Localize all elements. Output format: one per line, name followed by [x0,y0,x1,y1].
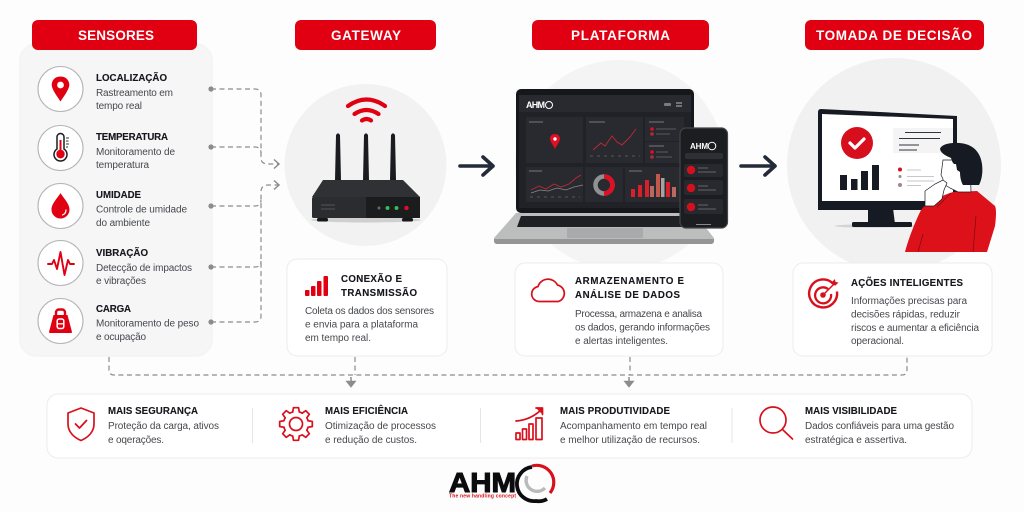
sensor: vibração: VIBRAÇÃO [96,248,148,259]
sensor: umidade: UMIDADE [96,190,142,201]
illustration: laptop dashboard: AHM [526,100,545,110]
benefit: mais produtividade [516,406,707,446]
benefit: mais visibilidade [760,406,954,446]
sensor: umidade [38,184,187,229]
card: conexão e transmissão: e envia para a plataforma [305,320,418,330]
heading: sensores [32,20,197,50]
card: armazenamento e análise: ARMAZENAMENTO E [575,276,685,287]
card: conexão e transmissão: Coleta os dados dos sensores [305,306,434,317]
card: ações inteligentes: riscos e aumentar a eficiência [851,323,979,334]
benefit: mais produtividade: MAIS PRODUTIVIDADE [560,406,671,417]
panel: gateway [284,20,447,356]
benefit: mais eficiência: MAIS EFICIÊNCIA [325,405,408,417]
panel: plataforma [494,20,728,356]
benefit: mais segurança: Proteção da carga, ativos [108,421,219,432]
sensor: localização: LOCALIZAÇÃO [96,73,167,84]
card: armazenamento e análise: os dados, gerando informações [575,322,710,334]
panel: benefits [47,394,972,458]
benefit: mais visibilidade: MAIS VISIBILIDADE [805,406,898,417]
illustration: phone: AHM [690,142,708,151]
sensor: carga [38,298,199,344]
sensor: carga: CARGA [96,304,131,315]
sensor: localização [38,66,173,112]
arrow: platform to decision [741,157,775,175]
benefit: mais visibilidade: Dados confiáveis para uma gestão [805,421,954,432]
heading: tomada de decisão: TOMADA DE DECISÃO [816,28,972,43]
card: armazenamento e análise: e alertas inteligentes. [575,336,668,347]
heading: plataforma [532,20,709,50]
icon: gear [280,408,312,440]
benefit: mais eficiência: Otimização de processos [325,421,436,432]
card: ações inteligentes [793,263,992,356]
sensor: temperatura: temperatura [96,160,149,171]
card: ações inteligentes: Informações precisas para [851,296,967,307]
sensor: umidade: do ambiente [96,218,150,229]
logo: AHM [449,465,554,501]
card: ações inteligentes: operacional. [851,336,904,347]
connector: sensors to gateway [208,86,279,325]
icon: cloud [532,279,564,302]
benefit: mais visibilidade: estratégica e assertiva. [805,435,907,446]
sensor: vibração: Detecção de impactos [96,263,192,274]
sensor: carga: Monitoramento de peso [96,318,199,330]
card: conexão e transmissão [287,259,447,356]
panel: tomada de decisão [787,20,1001,356]
card: conexão e transmissão: TRANSMISSÃO [341,288,417,299]
icon: magnifier [760,407,792,439]
logo: AHM: The new handling concept [449,494,516,500]
benefit: mais segurança: e oqerações. [108,435,164,446]
illustration: phone [680,128,728,228]
panel: sensors [20,20,212,356]
arrow: gateway to platform [460,157,493,175]
icon: signal bars [305,276,328,296]
connector: feedback line to benefits [109,357,907,386]
illustration: router [284,84,446,246]
card: armazenamento e análise: ANÁLISE DE DADOS [575,290,681,301]
heading: tomada de decisão [805,20,984,50]
card: ações inteligentes: decisões rápidas, reduzir [851,310,961,320]
sensor: umidade: Controle de umidade [96,204,187,216]
sensor: temperatura: TEMPERATURA [96,132,168,143]
illustration: laptop dashboard [494,89,714,244]
benefit: mais segurança: MAIS SEGURANÇA [108,406,198,417]
benefit: mais eficiência [280,405,436,446]
sensor: localização: Rastreamento em [96,88,173,99]
icon: shield [68,408,94,440]
heading: plataforma: PLATAFORMA [571,28,670,43]
logo: AHM: AHM [449,467,516,498]
icon: growth chart [516,408,542,440]
heading: sensores: SENSORES [78,28,154,43]
sensor: temperatura: Monitoramento de [96,147,175,158]
benefit: mais produtividade: Acompanhamento em tempo real [560,421,707,432]
illustration: person at monitor [787,58,1001,272]
sensor: vibração: e vibrações [96,276,146,287]
benefit: mais segurança [68,406,219,446]
heading: gateway: GATEWAY [331,28,401,43]
heading: gateway [295,20,436,50]
card: conexão e transmissão: CONEXÃO E [341,274,403,285]
card: conexão e transmissão: em tempo real. [305,333,371,344]
sensor: carga: e ocupação [96,332,146,343]
sensor: vibração [38,240,192,287]
sensor: temperatura [38,126,175,171]
card: armazenamento e análise: Processa, armazena e analisa [575,309,702,320]
sensor: localização: tempo real [96,101,142,112]
card: ações inteligentes: AÇÕES INTELIGENTES [851,278,964,289]
benefit: mais produtividade: e melhor utilização de recursos. [560,435,700,446]
icon: target [809,279,838,307]
card: armazenamento e análise [515,263,723,356]
benefit: mais eficiência: e redução de custos. [325,435,417,446]
